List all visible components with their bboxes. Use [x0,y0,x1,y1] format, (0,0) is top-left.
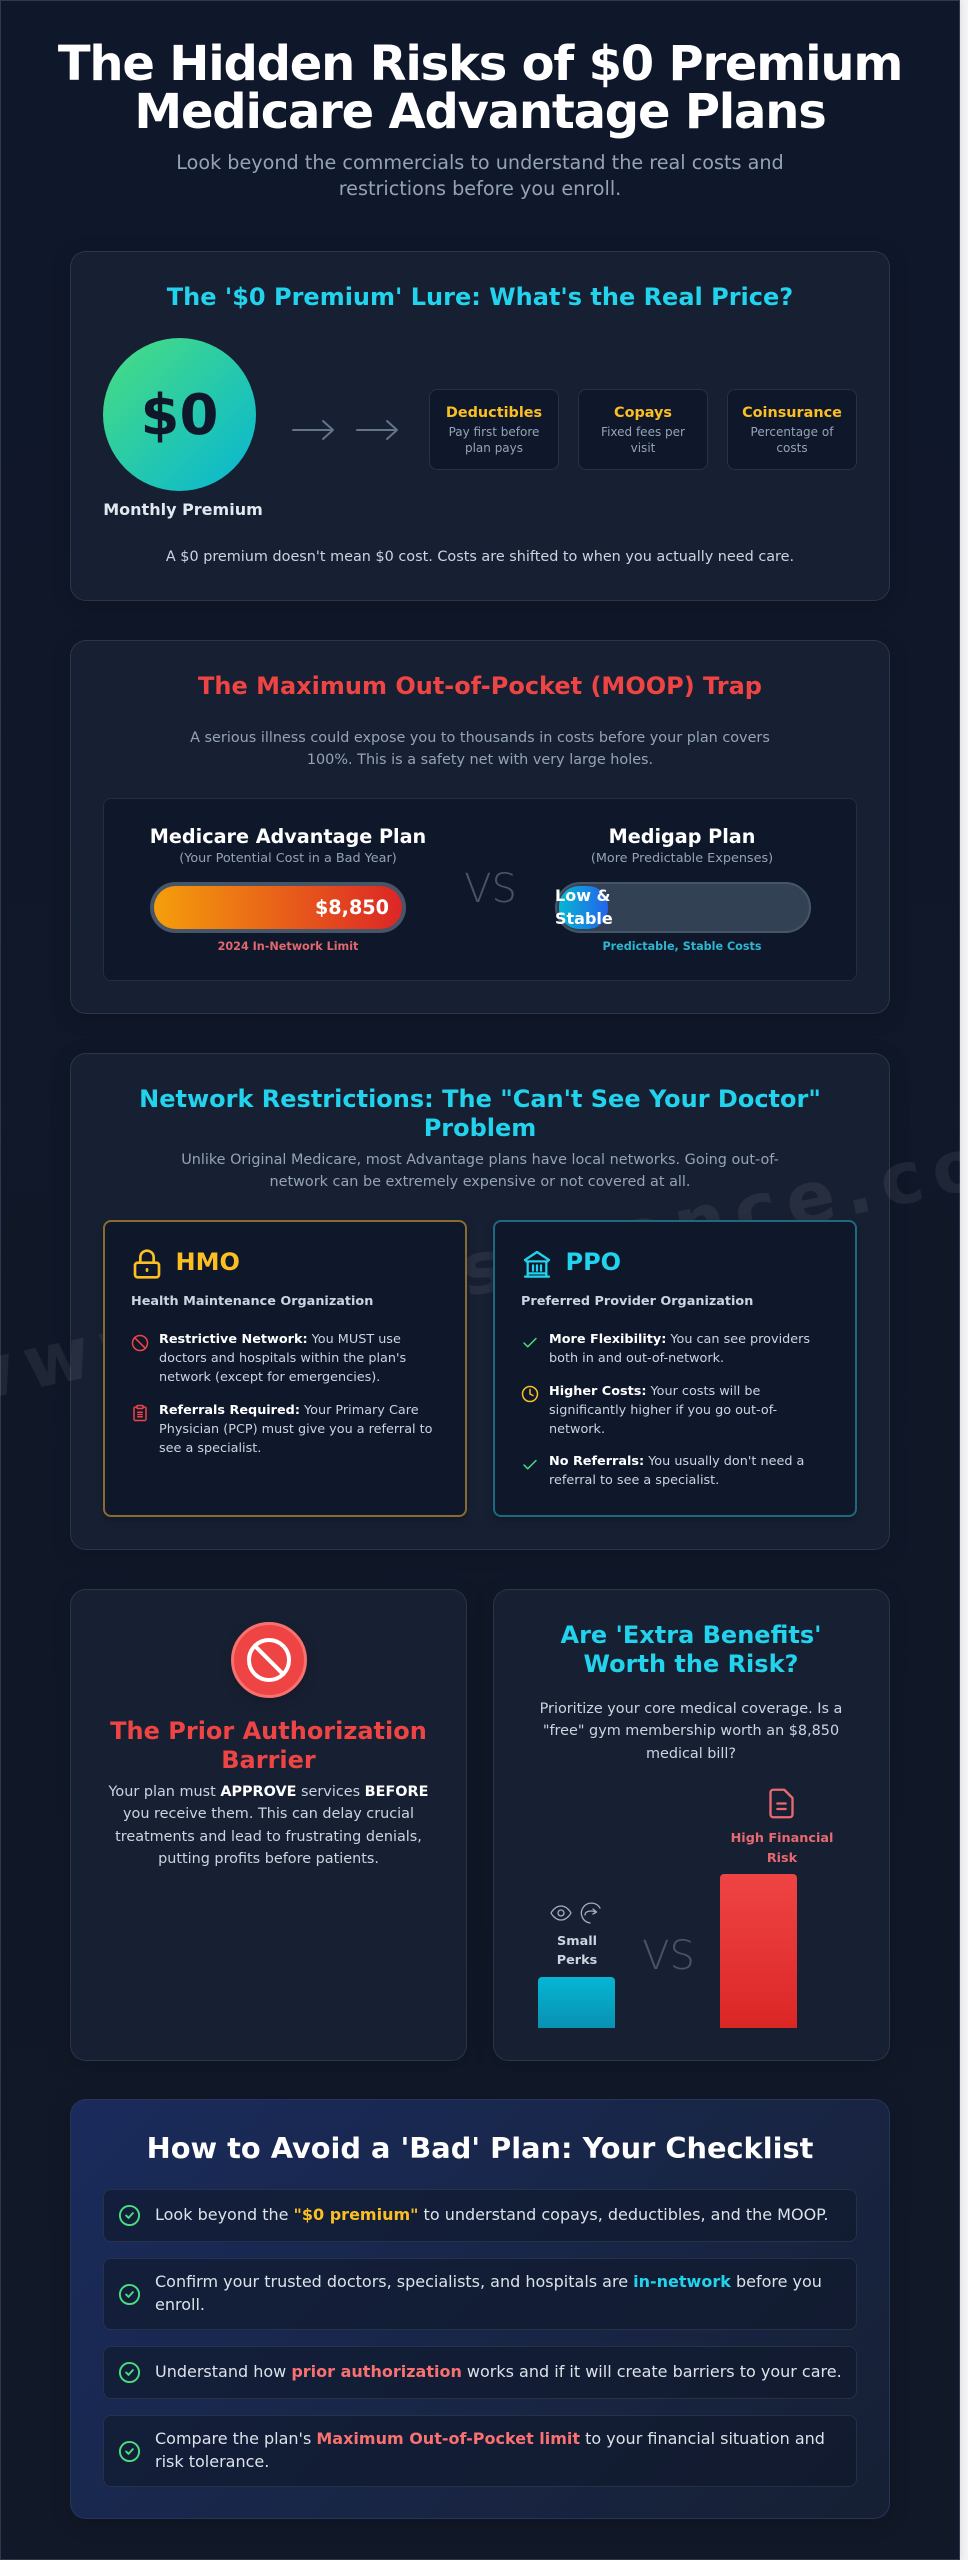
description: MOOP [190,730,770,768]
panel: the $0 premium lure [70,251,890,601]
subtitle: restrictions before you enroll. [339,177,621,200]
icon: prohibited circle [231,1622,307,1698]
plan title: medigap: Medigap Plan [609,825,755,848]
description: prior authorization: putting profits before patients. [158,1851,379,1867]
text: higher costs [549,1384,777,1437]
panel: checklist [70,2099,890,2519]
description: coinsurance [751,425,834,455]
value: low and stable [555,886,613,928]
heading: prior authorization [110,1716,427,1774]
text: higher costs: Higher Costs: Your costs will be [549,1384,760,1399]
heading: extra benefits [560,1620,821,1678]
value: low and stable: Low & [555,886,610,905]
text: more flexibility: More Flexibility: You can see providers [549,1332,810,1347]
item: compare limit: Compare the plan's Maximum Out-of-Pocket limit to your financial situation and [155,2429,825,2448]
label: monthly premium: Monthly Premium [103,500,263,519]
panel: PPO [493,1220,857,1517]
description: coinsurance: costs [776,441,808,455]
icon: ban [132,1334,148,1352]
icon: clipboard [133,1404,147,1422]
item: look beyond: Look beyond the "$0 premium" to understand copays, deductibles, and the MOOP. [155,2205,828,2224]
title: The Hidden Risks of $0 Premium [58,36,902,92]
heading: network [139,1085,821,1142]
heading: lure: The '$0 Premium' Lure: What's the Real Price? [167,283,793,311]
panel: prior authorization [70,1589,467,2061]
description: coinsurance: Percentage of [751,425,833,439]
panel: extra benefits [493,1589,890,2061]
text: no referrals [549,1454,804,1488]
icon: clock [522,1386,538,1402]
label: high financial risk: High Financial [731,1831,833,1846]
description: prior authorization: treatments and lead to frustrating denials, [115,1829,422,1845]
item: confirm doctors [103,2258,857,2330]
description: MOOP: 100%. This is a safety net with very large holes. [307,752,653,768]
fill: low and stable [559,886,608,929]
description: extra benefits: medical bill? [646,1746,736,1762]
item: compare limit: risk tolerance. [155,2452,269,2471]
icon: eye [550,1905,572,1921]
text: VS: VS [464,866,517,912]
text: higher costs: significantly higher if you go out-of- [549,1403,777,1418]
subtitle [176,151,784,200]
label: coinsurance: Coinsurance [742,405,842,421]
text: restrictive network: Restrictive Network: You MUST use [159,1332,401,1347]
heading: checklist: How to Avoid a 'Bad' Plan: Your Checklist [147,2131,813,2165]
text: more flexibility [549,1332,810,1366]
label: copays: Copays [614,405,672,421]
bar: high financial risk [720,1874,797,2028]
text: restrictive network: network (except for emergencies). [159,1370,380,1385]
label: high financial risk: Risk [767,1851,797,1866]
item: prior authorization: Understand how prior authorization works and if it will create barriers to your care. [155,2362,842,2381]
icon: $0 circle [103,338,256,491]
comparison box [103,798,857,981]
title [58,36,902,140]
heading: prior authorization: The Prior Authorization [110,1716,427,1744]
card: deductibles [429,389,559,470]
icon: document [769,1788,794,1818]
plan title: medicare advantage: Medicare Advantage Plan [150,825,426,848]
value: $8,850: $8,850 [315,896,389,919]
description: prior authorization: Your plan must APPROVE services BEFORE [109,1784,428,1800]
plan subtitle: advantage: (Your Potential Cost in a Bad Year) [179,851,397,866]
item: prior authorization [103,2346,857,2399]
text: referrals required: Physician (PCP) must give you a referral to [159,1422,433,1437]
value: low and stable: Stable [555,909,613,928]
description: network: network can be extremely expensive or not covered at all. [270,1174,690,1190]
heading: extra benefits: Are 'Extra Benefits' [561,1620,821,1648]
item: look beyond [103,2189,857,2242]
description: prior authorization: you receive them. This can delay crucial [123,1806,414,1822]
label: deductibles: Deductibles [446,405,542,421]
description: deductibles [449,425,539,455]
description: extra benefits: "free" gym membership worth an $8,850 [543,1723,839,1739]
description: copays: Fixed fees per [601,425,685,439]
label: small perks [557,1934,597,1968]
caption: A $0 premium doesn't mean $0 cost. Costs are shifted to when you actually need care. [166,549,794,565]
label: small perks: Perks [557,1953,597,1968]
heading: HMO: HMO [176,1248,240,1276]
icon: check one [523,1338,537,1348]
bar: small perks [538,1977,615,2028]
description: extra benefits [540,1701,842,1762]
text: restrictive network: doctors and hospitals within the plan's [159,1351,406,1366]
description: copays [601,425,685,455]
heading: prior authorization: Barrier [221,1746,316,1774]
caption: in-network limit: 2024 In-Network Limit [218,940,358,953]
panel: network restrictions [70,1053,890,1550]
icon: arrow one [292,420,334,440]
text: no referrals: referral to see a specialist. [549,1473,719,1488]
description: deductibles: plan pays [465,441,523,455]
heading: MOOP: The Maximum Out-of-Pocket (MOOP) Trap [198,672,762,700]
panel: MOOP trap [70,640,890,1014]
item: compare limit [103,2415,857,2487]
heading: PPO: PPO [566,1248,621,1276]
icon: $0 circle: $0 [141,383,218,448]
label: high financial risk [731,1831,833,1866]
text: referrals required: see a specialist. [159,1441,261,1456]
description: network: Unlike Original Medicare, most Advantage plans have local networks. Going out-of- [181,1152,779,1168]
heading: network: Network Restrictions: The "Can't See Your Doctor" [139,1085,821,1113]
description: extra benefits: Prioritize your core medical coverage. Is a [540,1701,842,1717]
fill: $8,850 [154,886,402,929]
icon: check two [523,1460,537,1470]
bar: medigap cost [555,882,811,933]
icon: lock [134,1249,160,1279]
title: Medicare Advantage Plans [134,84,826,140]
text: restrictive network [159,1332,406,1385]
description: network [181,1152,779,1190]
subtitle: Look beyond the commercials to understand the real costs and [176,151,784,174]
icon: arrow two [356,420,398,440]
item: confirm doctors: enroll. [155,2295,205,2314]
text: no referrals: No Referrals: You usually don't need a [549,1454,804,1469]
caption: stable costs: Predictable, Stable Costs [602,940,762,953]
text: higher costs: network. [549,1422,605,1437]
text: VS: VS [642,1933,695,1979]
name: HMO: Health Maintenance Organization [131,1294,373,1309]
icon: curved arrow [580,1902,601,1924]
text: more flexibility: both in and out-of-network. [549,1351,724,1366]
item: confirm doctors: Confirm your trusted doctors, specialists, and hospitals are in-network before you [155,2272,822,2291]
plan subtitle: medigap: (More Predictable Expenses) [591,851,773,866]
label: small perks: Small [557,1934,597,1949]
icon: bank [524,1250,550,1278]
description: MOOP: A serious illness could expose you to thousands in costs before your plan covers [190,730,770,746]
card: copays [578,389,708,470]
card: coinsurance [727,389,857,470]
description: prior authorization [108,1784,428,1867]
panel: HMO [103,1220,467,1517]
name: PPO: Preferred Provider Organization [521,1294,753,1309]
text: referrals required: Referrals Required: Your Primary Care [159,1403,419,1418]
heading: extra benefits: Worth the Risk? [584,1650,798,1678]
description: copays: visit [631,441,655,455]
bar: advantage cost [150,882,406,933]
heading: network: Problem [424,1114,536,1142]
description: deductibles: Pay first before [449,425,539,439]
text: referrals required [159,1403,433,1456]
